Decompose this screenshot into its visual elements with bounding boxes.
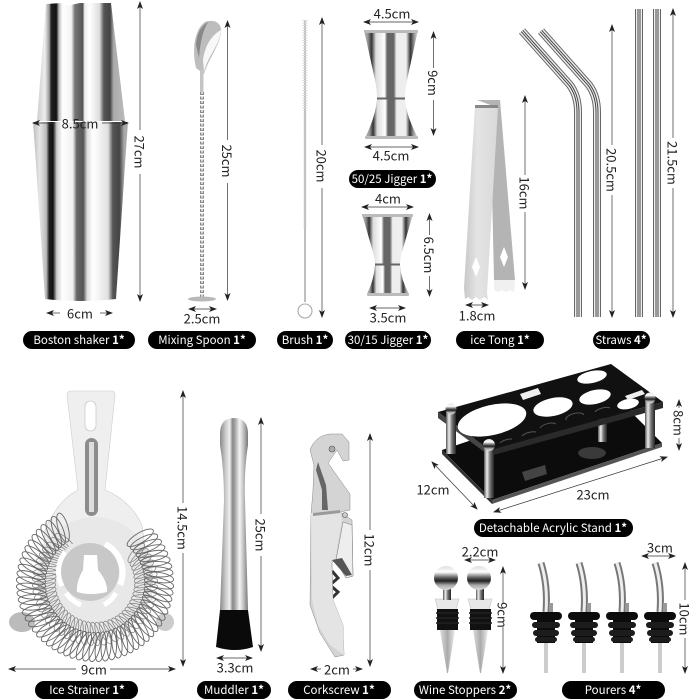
panel: 30/15 jigger [345, 188, 439, 349]
width arrow: 3.3cm: 3.3cm [217, 658, 253, 676]
panel: 50/25 jigger [349, 4, 443, 188]
height arrow: 9cm [494, 567, 512, 673]
icon: pourer 4 [644, 563, 676, 673]
height arrow: 10cm [676, 563, 694, 673]
height arrow: 16cm: 16cm [516, 176, 534, 210]
height arrow: 9cm: 9cm [424, 70, 443, 96]
height arrow: 8cm: 8cm [670, 410, 688, 436]
height arrow: 6.5cm: 6.5cm [420, 237, 439, 273]
bottom width: 3.5cm: 3.5cm [370, 308, 406, 326]
icon: strainer [9, 391, 175, 663]
top width: 4.5cm: 4.5cm [374, 4, 410, 22]
panel: Boston shaker [23, 2, 150, 349]
top width: 4cm: 4cm [375, 188, 401, 208]
height arrow: 21.5cm: 21.5cm [664, 141, 682, 185]
icon: tong [464, 100, 515, 300]
height arrow: 9cm [424, 32, 443, 135]
bottom width: 4.5cm: 4.5cm [373, 146, 409, 164]
label: 30/15 Jigger: 30/15 Jigger 1* [348, 332, 429, 348]
height arrow: 25cm: 25cm [252, 518, 270, 552]
width arrow: 8.5cm: 8.5cm [62, 114, 98, 132]
icon: pourer 3 [606, 563, 638, 673]
label: Straws: Straws 4* [595, 332, 647, 348]
panel: Mixing spoon [148, 21, 256, 349]
label: Wine Stoppers: Wine Stoppers 2* [419, 682, 511, 698]
icon: pourer 2 [568, 563, 600, 673]
panel: Brush [277, 18, 333, 349]
height arrow: 9cm: 9cm [494, 602, 512, 628]
top width: 4cm [362, 188, 413, 208]
icon: stopper right [467, 566, 492, 673]
width arrow: 1.8cm: 1.8cm [459, 306, 495, 324]
panel: Pourers [530, 538, 694, 699]
base arrow: 6cm: 6cm [67, 304, 93, 322]
label: ice Tong: ice Tong 1* [470, 332, 530, 348]
label: Detachable Acrylic Stand: Detachable Acrylic Stand 1* [479, 520, 627, 536]
label: Muddler: Muddler 1* [204, 682, 264, 698]
icon: straight straws [639, 9, 657, 317]
height arrow: 8cm [670, 400, 688, 450]
icon: shaker [33, 3, 128, 301]
label: Corkscrew: Corkscrew 1* [303, 682, 375, 698]
label: Pourers: Pourers 4* [585, 682, 641, 698]
width arrow: 8.5cm [33, 114, 128, 132]
panel: Wine stoppers [414, 542, 517, 699]
width arrow: 9cm: 9cm [81, 660, 107, 678]
width arrow: 2cm [311, 660, 362, 678]
panel: Muddler [197, 418, 271, 699]
icon: spoon [188, 21, 221, 301]
label: Pourers [562, 681, 665, 699]
label: ice Tong [456, 331, 544, 349]
label: Mixing Spoon: Mixing Spoon 1* [158, 332, 246, 348]
icon: muddler [216, 418, 253, 650]
height arrow: 12cm: 12cm [360, 533, 380, 567]
width arrow: 2.5cm: 2.5cm [184, 308, 220, 328]
label: Corkscrew [288, 681, 391, 699]
height arrow: 20.5cm: 20.5cm [602, 148, 622, 192]
width arrow: 2cm: 2cm [324, 660, 350, 678]
panel: Straws [522, 9, 682, 349]
label: Brush: Brush 1* [282, 332, 328, 348]
panel: Ice strainer [9, 391, 192, 699]
diagonal arrow: 23cm: 23cm [576, 484, 610, 504]
label: 50/25 Jigger: 50/25 Jigger 1* [352, 171, 433, 187]
width arrow: 3cm: 3cm [647, 538, 673, 556]
panel: Ice tong [456, 96, 544, 349]
bottom width: 4.5cm [365, 146, 418, 164]
icon: jigger large [364, 30, 418, 139]
height arrow: 20cm: 20cm [312, 149, 332, 183]
diagonal arrow: 23cm [494, 457, 667, 512]
diagonal arrow: 12cm: 12cm [416, 480, 450, 498]
top width: 4.5cm [364, 4, 418, 22]
label: Ice Strainer [35, 681, 138, 699]
height arrow: 10cm: 10cm [676, 602, 694, 636]
diagonal arrow: 12cm [416, 462, 477, 509]
panel: Corkscrew [288, 434, 391, 699]
icon: pourer 1 [530, 563, 562, 673]
icon: bent straws [522, 31, 597, 317]
icon: jigger small [362, 214, 413, 296]
height arrow: 25cm: 25cm [218, 144, 237, 178]
height arrow: 27cm: 27cm [130, 135, 150, 169]
panel: Acrylic stand [416, 364, 688, 537]
icon: corkscrew [310, 434, 353, 657]
height arrow: 6.5cm [420, 214, 439, 296]
icon: stand [438, 364, 663, 504]
icon: brush [298, 20, 312, 318]
base arrow: 6cm [47, 304, 112, 322]
label: Boston shaker: Boston shaker 1* [33, 332, 125, 348]
icon: stopper left [434, 566, 459, 673]
width arrow: 2.2cm: 2.2cm [462, 542, 498, 560]
height arrow: 14.5cm: 14.5cm [174, 506, 192, 550]
label: Ice Strainer: Ice Strainer 1* [49, 682, 125, 698]
